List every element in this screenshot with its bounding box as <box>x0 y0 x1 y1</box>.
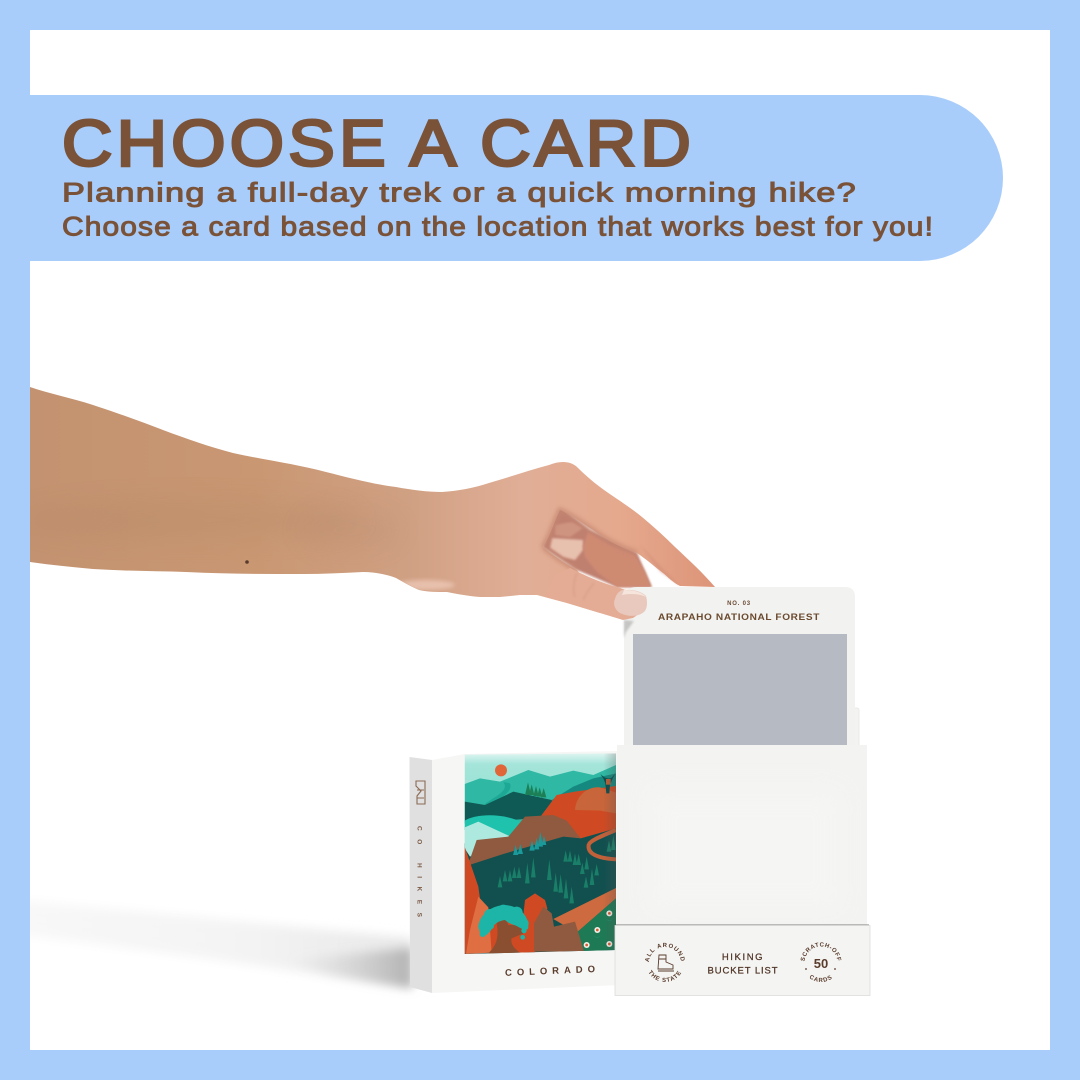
title: CHOOSE A CARD <box>62 106 695 180</box>
band subheading: BUCKET LIST <box>708 966 778 976</box>
right badge: SCRATCH-OFF <box>800 942 842 962</box>
sun <box>495 764 507 776</box>
card number: NO. 03 <box>727 601 751 607</box>
floor shadow <box>81 915 416 993</box>
sleeve band <box>615 926 870 996</box>
skin mole <box>245 560 249 564</box>
pine trees <box>498 782 616 903</box>
back card edge <box>850 708 859 748</box>
band heading: HIKING <box>722 952 764 963</box>
palm fold <box>555 522 583 537</box>
forearm and index finger <box>30 387 715 613</box>
product box: Colorado deck <box>410 750 620 993</box>
nail tip <box>622 590 646 597</box>
subtitle line 2: Choose a card based on the location that works best for you! <box>62 212 934 242</box>
inner palm shadow <box>543 507 652 587</box>
flowers <box>584 910 612 948</box>
boot icon <box>658 955 674 971</box>
right badge: 50 <box>814 956 828 971</box>
left badge <box>645 942 685 982</box>
hiker <box>600 773 615 793</box>
silver scratch area <box>633 634 847 745</box>
banner shape <box>30 95 1003 261</box>
thumb <box>545 568 647 638</box>
card title: ARAPAHO NATIONAL FOREST <box>658 612 820 623</box>
tree <box>488 920 524 954</box>
base fill <box>460 843 620 957</box>
left badge: THE STATE <box>649 970 682 982</box>
card body <box>624 587 855 745</box>
band top line <box>616 924 869 926</box>
sleeve body <box>617 745 867 926</box>
finger crease shading <box>543 510 637 570</box>
subtitle line 1: Planning a full-day trek or a quick morning hike? <box>62 178 857 208</box>
box label: COLORADO <box>505 964 595 979</box>
right badge <box>800 942 842 982</box>
left badge: ALL AROUND <box>645 942 685 962</box>
sleeve highlight <box>650 790 840 910</box>
pale inner palm <box>550 538 583 560</box>
box spine <box>410 757 432 993</box>
spine label: CO HIKES <box>416 826 422 925</box>
header banner <box>30 95 1003 261</box>
spine logo icon <box>416 781 425 804</box>
arm and hand <box>20 387 715 613</box>
middle finger <box>583 532 651 587</box>
thumbnail <box>614 590 647 616</box>
illustration <box>460 750 620 957</box>
front sleeve <box>614 745 870 996</box>
box front <box>432 751 620 993</box>
scratch card <box>624 587 855 745</box>
right badge: CARDS <box>810 975 832 982</box>
